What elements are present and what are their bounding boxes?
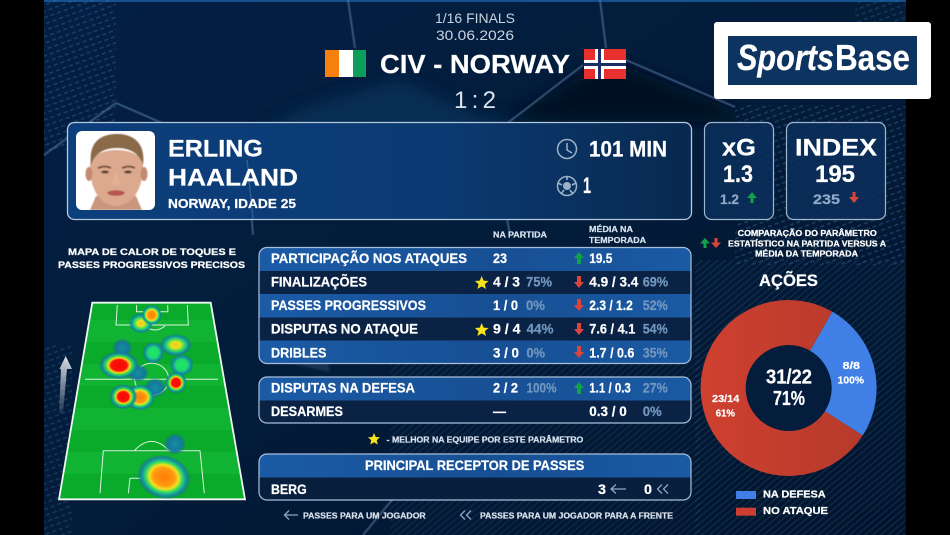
player nationality and age: NORWAY, IDADE 25 xyxy=(168,197,296,211)
row: dribles: 3 / 0 xyxy=(493,345,519,360)
row: participação nos ataques xyxy=(271,251,613,266)
segment: attack xyxy=(701,300,863,476)
row: disputas no ataque: 9 / 4 xyxy=(493,322,521,337)
match header xyxy=(325,11,626,114)
row: disputas no ataque: 54% xyxy=(643,322,668,337)
pass legend: PASSES PARA UM JOGADOR PARA A FRENTE xyxy=(480,512,674,520)
heatmap pitch xyxy=(50,303,250,505)
donut legend: NA DEFESA xyxy=(763,489,826,500)
goals: 1 xyxy=(583,173,591,198)
score: 1 : 2 xyxy=(454,87,496,114)
flag: Ivory Coast xyxy=(325,50,366,77)
panel: xG xyxy=(704,122,774,220)
panel: index xyxy=(786,122,886,220)
row: finalizações: 69% xyxy=(643,275,668,290)
minutes played: 101 MIN xyxy=(589,136,667,162)
table headers: TEMPORADA xyxy=(589,236,646,245)
panel: xG: 1.2 xyxy=(720,191,739,207)
panel: main pass receiver: 3 xyxy=(598,482,607,497)
match title: CIV - NORWAY xyxy=(380,49,570,79)
heat spots xyxy=(99,305,196,505)
row: passes progressivos: PASSES PROGRESSIVOS xyxy=(271,298,426,313)
attack values: 23/14 xyxy=(712,394,740,405)
row: finalizações: FINALIZAÇÕES xyxy=(271,275,367,290)
icon: pass arrow xyxy=(611,484,626,494)
table headers xyxy=(493,225,646,245)
table headers: MÉDIA NA xyxy=(589,225,633,234)
logo: SportsBase: Sports xyxy=(737,37,834,78)
row: dribles: 1.7 / 0.6 xyxy=(589,345,635,360)
row: passes progressivos: 0% xyxy=(526,298,545,313)
row: passes progressivos: 1 / 0 xyxy=(493,298,518,313)
row: passes progressivos xyxy=(271,298,668,313)
defense values: 8/8 xyxy=(843,361,861,372)
logo: SportsBase xyxy=(714,22,931,99)
row: finalizações xyxy=(271,275,668,290)
icon: clock xyxy=(558,140,576,158)
player photo xyxy=(76,131,155,210)
row: dribles: 0% xyxy=(526,345,545,360)
row: desarmes: 0% xyxy=(643,404,662,419)
row: finalizações: 4 / 3 xyxy=(493,275,520,290)
row: dribles xyxy=(271,345,668,360)
icon: red down arrow xyxy=(849,192,859,203)
panel: defense stats table xyxy=(259,377,691,423)
panel: main pass receiver xyxy=(259,454,691,500)
donut legend: NO ATAQUE xyxy=(763,506,828,517)
actions title: AÇÕES xyxy=(759,270,818,290)
row: desarmes: 0.3 / 0 xyxy=(589,404,627,419)
panel: xG: 1.3 xyxy=(723,161,753,188)
panel: index: 195 xyxy=(815,161,855,188)
pass legend: PASSES PARA UM JOGADOR xyxy=(303,512,426,520)
row: disputas no ataque: DISPUTAS NO ATAQUE xyxy=(271,322,418,337)
row: desarmes: — xyxy=(493,404,506,419)
note: comparison legend: COMPARAÇÃO DO PARÂMETRO xyxy=(738,229,877,238)
heatmap title xyxy=(58,247,245,270)
row: participação nos ataques: PARTICIPAÇÃO NOS ATAQUES xyxy=(271,251,467,266)
row: dribles: DRIBLES xyxy=(271,345,326,360)
row: disputas na defesa: 1.1 / 0.3 xyxy=(589,381,631,396)
table headers: NA PARTIDA xyxy=(493,231,547,240)
donut chart: actions: 100% xyxy=(838,375,864,386)
pass legend xyxy=(284,510,674,520)
row: desarmes: DESARMES xyxy=(271,404,343,419)
row: finalizações: 4.9 / 3.4 xyxy=(589,275,639,290)
row: disputas na defesa: 2 / 2 xyxy=(493,381,518,396)
panel: player xyxy=(68,122,692,220)
row: disputas na defesa xyxy=(271,381,668,396)
panel: player: HAALAND xyxy=(168,164,298,192)
note: comparison legend xyxy=(700,229,886,259)
row: desarmes xyxy=(271,404,662,419)
note: comparison legend: MÉDIA DA TEMPORADA xyxy=(755,250,858,259)
row: disputas na defesa: 27% xyxy=(643,381,668,396)
icon: forward pass chevrons xyxy=(658,484,668,494)
row: dribles: 35% xyxy=(643,345,668,360)
player name: ERLING xyxy=(168,136,263,162)
row: disputas na defesa: DISPUTAS NA DEFESA xyxy=(271,381,415,396)
arrow: attack direction xyxy=(59,356,72,413)
panel: index: INDEX xyxy=(795,135,878,162)
icon: football xyxy=(558,176,576,196)
row: disputas no ataque: 7.6 / 4.1 xyxy=(589,322,636,337)
panel: main pass receiver: BERG xyxy=(271,482,307,497)
panel: xG: xG xyxy=(722,135,756,162)
heatmap title: MAPA DE CALOR DE TOQUES E xyxy=(68,247,236,257)
icon: green up arrow xyxy=(747,192,757,203)
donut centre total: 31/22 xyxy=(766,366,812,388)
panel: main pass receiver: 0 xyxy=(644,482,652,497)
row: disputas no ataque xyxy=(271,322,668,337)
row: finalizações: 75% xyxy=(526,275,552,290)
row: passes progressivos: 2.3 / 1.2 xyxy=(589,298,633,313)
row: participação nos ataques: 19.5 xyxy=(589,251,613,266)
donut chart: actions xyxy=(701,300,877,476)
flag: Norway xyxy=(584,49,626,79)
panel: main pass receiver: PRINCIPAL RECEPTOR DE PASSES xyxy=(365,458,584,473)
panel: index: 235 xyxy=(813,191,840,207)
logo: SportsBase: Base xyxy=(835,37,910,78)
date: 30.06.2026 xyxy=(436,28,514,43)
note: comparison legend: ESTATÍSTICO NA PARTIDA VERSUS A xyxy=(728,239,886,248)
row: disputas na defesa: 100% xyxy=(526,381,556,396)
note: best in team: - MELHOR NA EQUIPE POR ESTE PARÂMETRO xyxy=(387,436,583,444)
row: participação nos ataques: 23 xyxy=(493,251,507,266)
donut legend xyxy=(736,489,828,517)
heatmap title: PASSES PROGRESSIVOS PRECISOS xyxy=(58,260,245,270)
donut chart: actions: 71% xyxy=(773,388,805,410)
row: disputas no ataque: 44% xyxy=(526,322,554,337)
stage: 1/16 FINALS xyxy=(435,11,515,26)
note: best in team xyxy=(368,433,583,444)
segment: defense xyxy=(810,312,877,436)
donut chart: actions: 61% xyxy=(716,409,735,420)
panel: attack stats table xyxy=(259,247,691,364)
row: passes progressivos: 52% xyxy=(643,298,668,313)
